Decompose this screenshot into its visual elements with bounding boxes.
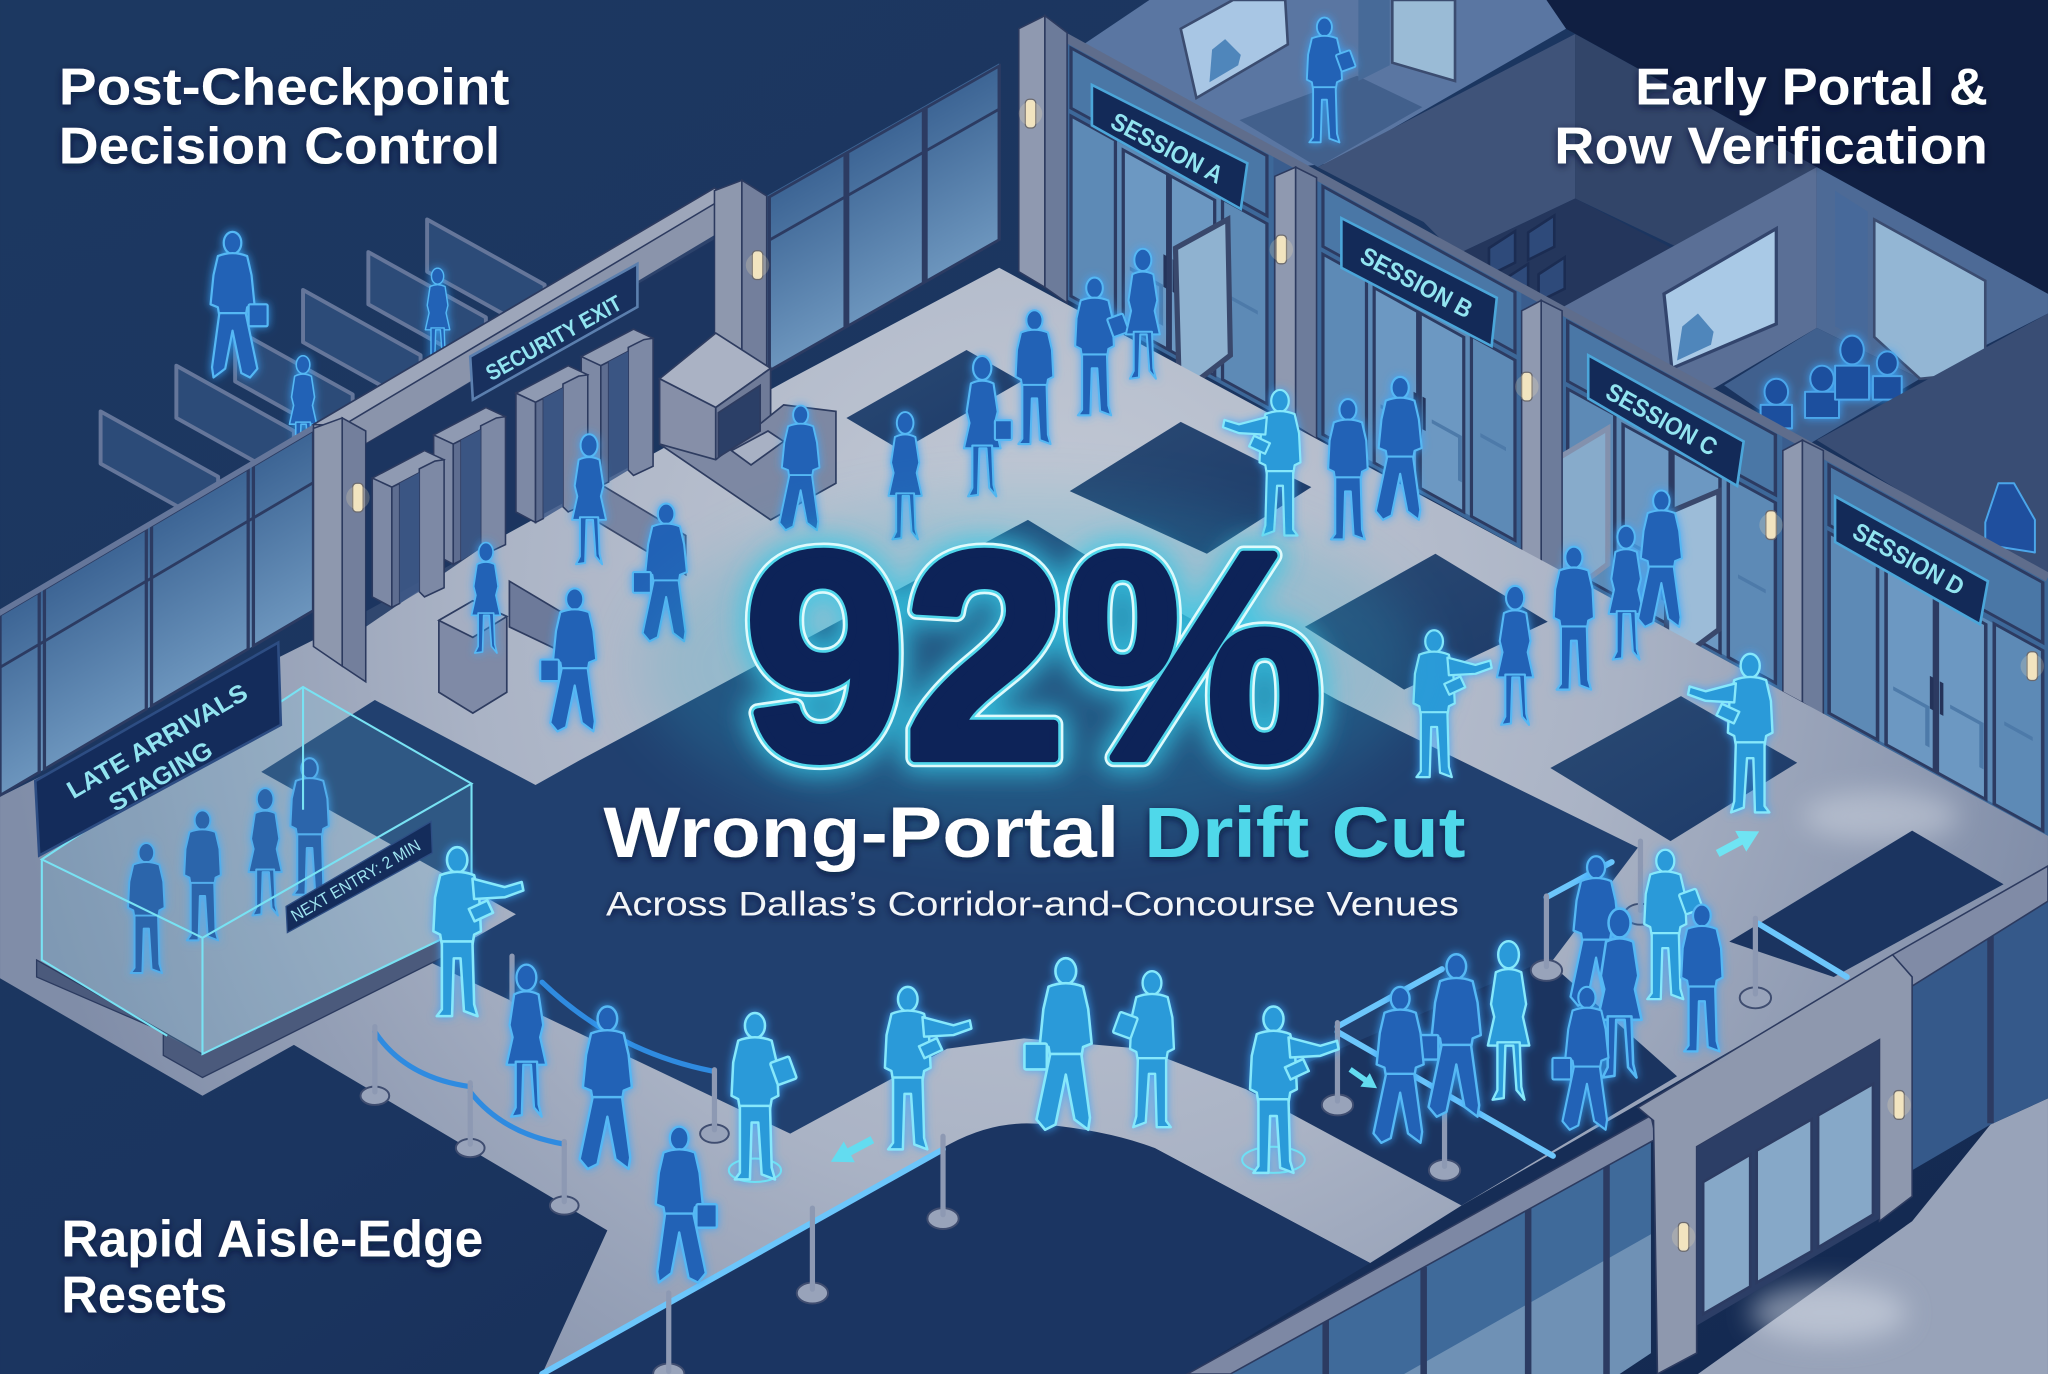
doors	[1697, 1040, 1879, 1326]
staff with tablet	[732, 1013, 797, 1179]
stanchions and ropes	[361, 841, 1847, 1374]
seated audience	[1761, 336, 1902, 428]
floor arrow: up-right	[1712, 821, 1765, 864]
label: bottom-left	[61, 1210, 483, 1325]
carpet diamond 1	[846, 350, 1021, 451]
session wall	[1019, 16, 2048, 840]
person	[1374, 987, 1424, 1143]
woman at door	[1126, 249, 1160, 379]
label: top-left: Decision Control	[59, 117, 500, 175]
carpet areas	[261, 350, 2004, 1206]
security people	[471, 406, 819, 731]
window	[1874, 219, 1985, 379]
open door C right	[1667, 491, 1719, 669]
label: bottom-left: Resets	[61, 1267, 227, 1325]
right beam	[1893, 866, 2048, 986]
sign: security exit	[470, 264, 637, 400]
queue: session c	[1413, 490, 1772, 812]
label: top-right: Early Portal &	[1635, 58, 1988, 116]
label: top-left: Post-Checkpoint	[59, 58, 509, 116]
carpet diamond 3	[1305, 554, 1548, 690]
room: top conference room	[1081, 0, 1566, 167]
floor arrow: down-right	[1345, 1063, 1382, 1095]
big stat: 92%: 92%	[744, 493, 1322, 821]
pillars	[1019, 16, 1045, 287]
turnstile	[439, 477, 686, 713]
sign: security exit: SECURITY EXIT	[481, 290, 626, 386]
person	[1328, 399, 1368, 539]
woman	[507, 965, 546, 1117]
queue: session b	[1223, 377, 1422, 539]
left glass wall	[0, 428, 313, 795]
security queue panels	[101, 219, 545, 529]
sign: late arrivals staging: STAGING	[104, 737, 218, 818]
person with briefcase	[540, 588, 596, 731]
bay B	[1317, 175, 1521, 549]
people waiting	[128, 758, 329, 973]
woman with tablet	[1497, 586, 1533, 725]
person	[289, 356, 317, 460]
staging base	[37, 925, 472, 1078]
staff with tablet	[1113, 971, 1174, 1127]
label: top-right: Row Verification	[1554, 117, 1988, 175]
light reflection on floor	[1802, 790, 1959, 842]
person with tablet	[1075, 278, 1129, 415]
bay D	[1822, 453, 2048, 840]
carpet by cluster	[1246, 960, 1677, 1206]
sign: session a	[1092, 85, 1247, 209]
staff ring	[729, 1158, 781, 1182]
sign: session c: SESSION C	[1601, 379, 1722, 462]
wall lamps	[346, 99, 2044, 680]
woman with tablet	[572, 434, 606, 564]
carpet diamond 4	[1550, 696, 1797, 841]
staff pointing	[1250, 1007, 1339, 1173]
staff at right	[1688, 654, 1772, 812]
sign: late arrivals staging	[35, 643, 281, 855]
screen	[1664, 229, 1776, 368]
people behind security	[211, 232, 450, 460]
cluster of people	[1374, 850, 1723, 1143]
beam	[1187, 1115, 1656, 1374]
open door C left	[1556, 428, 1608, 603]
carpet diamond 2	[1070, 422, 1311, 554]
bottom carpet	[542, 1123, 1370, 1374]
sign: session c	[1588, 355, 1744, 486]
man with case	[1417, 954, 1481, 1117]
sign: session a: SESSION A	[1106, 108, 1227, 190]
sign: session d: SESSION D	[1848, 518, 1968, 602]
lamp	[1672, 1222, 1695, 1251]
person	[1681, 905, 1723, 1051]
person with briefcase	[633, 504, 687, 641]
person	[425, 268, 450, 362]
sign: session b	[1341, 218, 1497, 346]
woman staff with briefcase	[1024, 958, 1092, 1130]
staff ring	[1242, 1147, 1305, 1173]
projection screen	[1181, 0, 1288, 98]
lamp	[1887, 1091, 1911, 1119]
glass box	[42, 687, 472, 1054]
security portal pillars and beam	[313, 180, 767, 682]
person	[1571, 856, 1619, 1006]
tile floor	[1698, 1098, 2048, 1374]
late arrivals staging box	[35, 643, 472, 1078]
woman	[889, 412, 922, 539]
big stat: 92%: 92%	[744, 493, 1322, 821]
portal	[1638, 955, 1912, 1374]
headline: Drift Cut	[1144, 793, 1466, 873]
woman	[1598, 909, 1642, 1078]
floor arrow: left	[825, 1129, 878, 1172]
man with case	[1552, 987, 1608, 1130]
headline	[603, 793, 1466, 873]
person in room	[1307, 18, 1356, 142]
person at turnstile	[471, 543, 500, 653]
room: far-right room	[1817, 313, 2048, 581]
sign: next entry: NEXT ENTRY: 2 MIN	[288, 836, 424, 926]
bay C	[1561, 310, 1782, 692]
aisle people	[433, 847, 1339, 1283]
central carpet	[261, 520, 1638, 1134]
person	[1016, 310, 1053, 444]
sign: session d	[1835, 496, 1988, 624]
room: presentation room	[1561, 167, 2048, 444]
person walking	[1376, 377, 1422, 520]
curtains and window	[1358, 0, 1390, 81]
open door A	[1176, 219, 1230, 394]
staff pointing	[1413, 630, 1492, 777]
big stat: 92%: 92%	[744, 493, 1322, 821]
queue: session a	[889, 249, 1160, 539]
right glass	[1912, 901, 2048, 1170]
carpet right	[1729, 831, 2004, 977]
sign: session b: SESSION B	[1356, 243, 1477, 324]
label: bottom-left: Rapid Aisle-Edge	[61, 1210, 483, 1268]
glass wall left	[1230, 1139, 1651, 1374]
person at x-ray	[779, 406, 819, 530]
upper-left glass wall	[767, 63, 999, 372]
staff pointing at staging	[433, 847, 523, 1016]
person entering	[1638, 490, 1682, 627]
bay A	[1064, 37, 1273, 413]
lower wall	[1187, 866, 2048, 1374]
staff	[1644, 850, 1703, 999]
woman	[1609, 526, 1644, 660]
top-right dark backdrop	[1546, 0, 2048, 294]
x-ray machine	[660, 333, 836, 520]
center haze	[640, 496, 1424, 836]
big stat: 92%: 92%	[744, 493, 1322, 821]
staff pointing	[1223, 390, 1300, 535]
label: top-left	[59, 58, 509, 175]
sign: late arrivals staging: LATE ARRIVALS	[63, 679, 253, 805]
subheading: Across Dallas’s Corridor-and-Concourse Venues	[606, 886, 1459, 924]
metal detectors	[372, 329, 653, 607]
person	[1554, 547, 1594, 690]
staff waving	[885, 987, 971, 1149]
room: dark empty room with chairs	[1318, 34, 1817, 313]
man with briefcase	[656, 1127, 717, 1283]
headline: Wrong-Portal	[603, 793, 1119, 873]
person with bag	[211, 232, 268, 377]
woman	[1488, 941, 1529, 1100]
woman with bag	[964, 356, 1012, 496]
man	[580, 1007, 632, 1169]
label: top-right	[1554, 58, 1988, 175]
